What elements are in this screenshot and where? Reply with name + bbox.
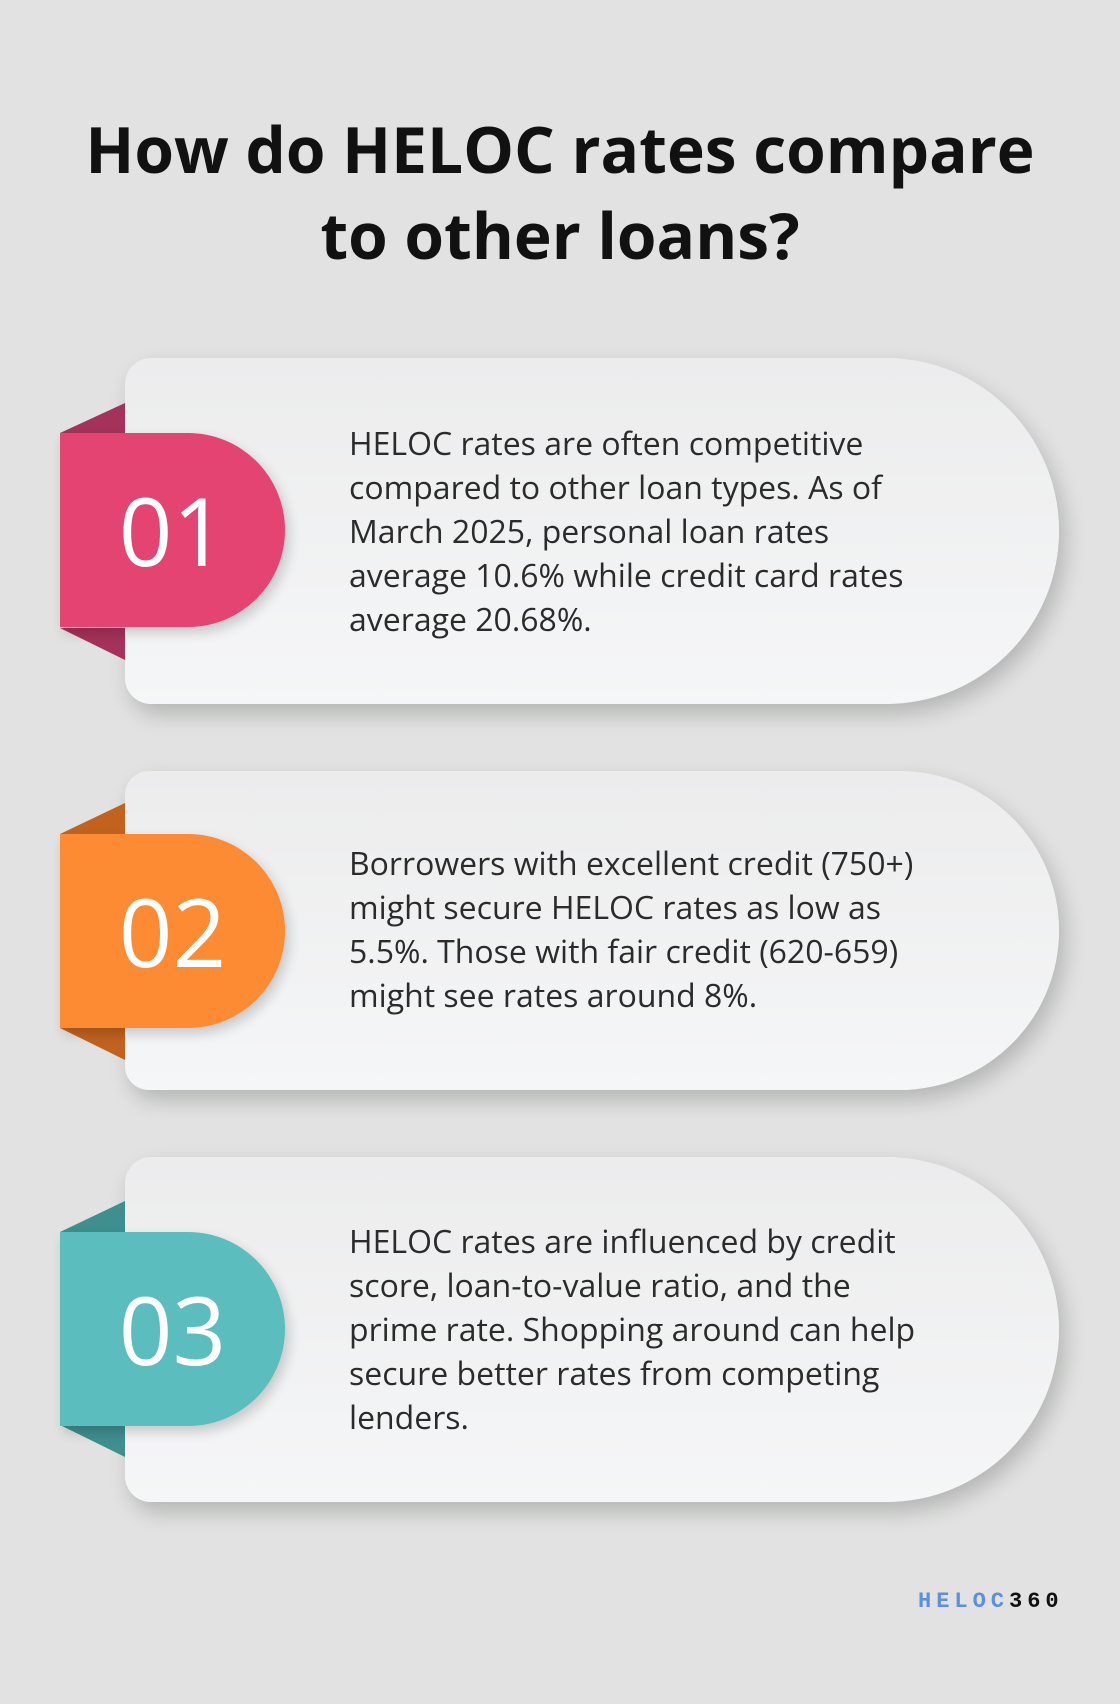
title xyxy=(85,105,1035,278)
text 1: HELOC rates are often competitive xyxy=(349,422,863,465)
fold 1 xyxy=(60,403,125,660)
text 2: Borrowers with excellent credit (750+) xyxy=(349,842,913,885)
tab 02: 02 xyxy=(119,867,226,995)
text 3: score, loan-to-value ratio, and the xyxy=(349,1264,851,1307)
text 3: prime rate. Shopping around can help xyxy=(349,1308,915,1351)
text 1: average 20.68%. xyxy=(349,598,592,641)
panel: card 1 xyxy=(125,358,1059,704)
fold 3 xyxy=(60,1201,125,1457)
text 1: March 2025, personal loan rates xyxy=(349,510,829,553)
text 3: HELOC rates are influenced by credit xyxy=(349,1220,896,1263)
text 2: might secure HELOC rates as low as xyxy=(349,886,881,929)
tab 01 xyxy=(60,433,285,627)
tab 01: 01 xyxy=(119,466,226,594)
tab 03 xyxy=(60,1232,285,1426)
title: How do HELOC rates compare xyxy=(85,105,1035,192)
text 1 xyxy=(349,422,903,641)
text 3 xyxy=(349,1220,915,1439)
text 3: secure better rates from competing xyxy=(349,1352,879,1395)
text 1: average 10.6% while credit card rates xyxy=(349,554,903,597)
panel: card 2 xyxy=(125,771,1059,1090)
text 2: 5.5%. Those with fair credit (620-659) xyxy=(349,930,898,973)
panel: card 3 xyxy=(125,1157,1059,1502)
fold 2 xyxy=(60,803,125,1060)
text 2: might see rates around 8%. xyxy=(349,974,757,1017)
title: to other loans? xyxy=(320,191,800,278)
text 3: lenders. xyxy=(349,1396,469,1439)
logo: HELOC360 xyxy=(918,1589,1064,1614)
tab 02 xyxy=(60,834,285,1028)
text 1: compared to other loan types. As of xyxy=(349,466,882,509)
tab 03: 03 xyxy=(119,1265,226,1393)
text 2 xyxy=(349,842,913,1017)
